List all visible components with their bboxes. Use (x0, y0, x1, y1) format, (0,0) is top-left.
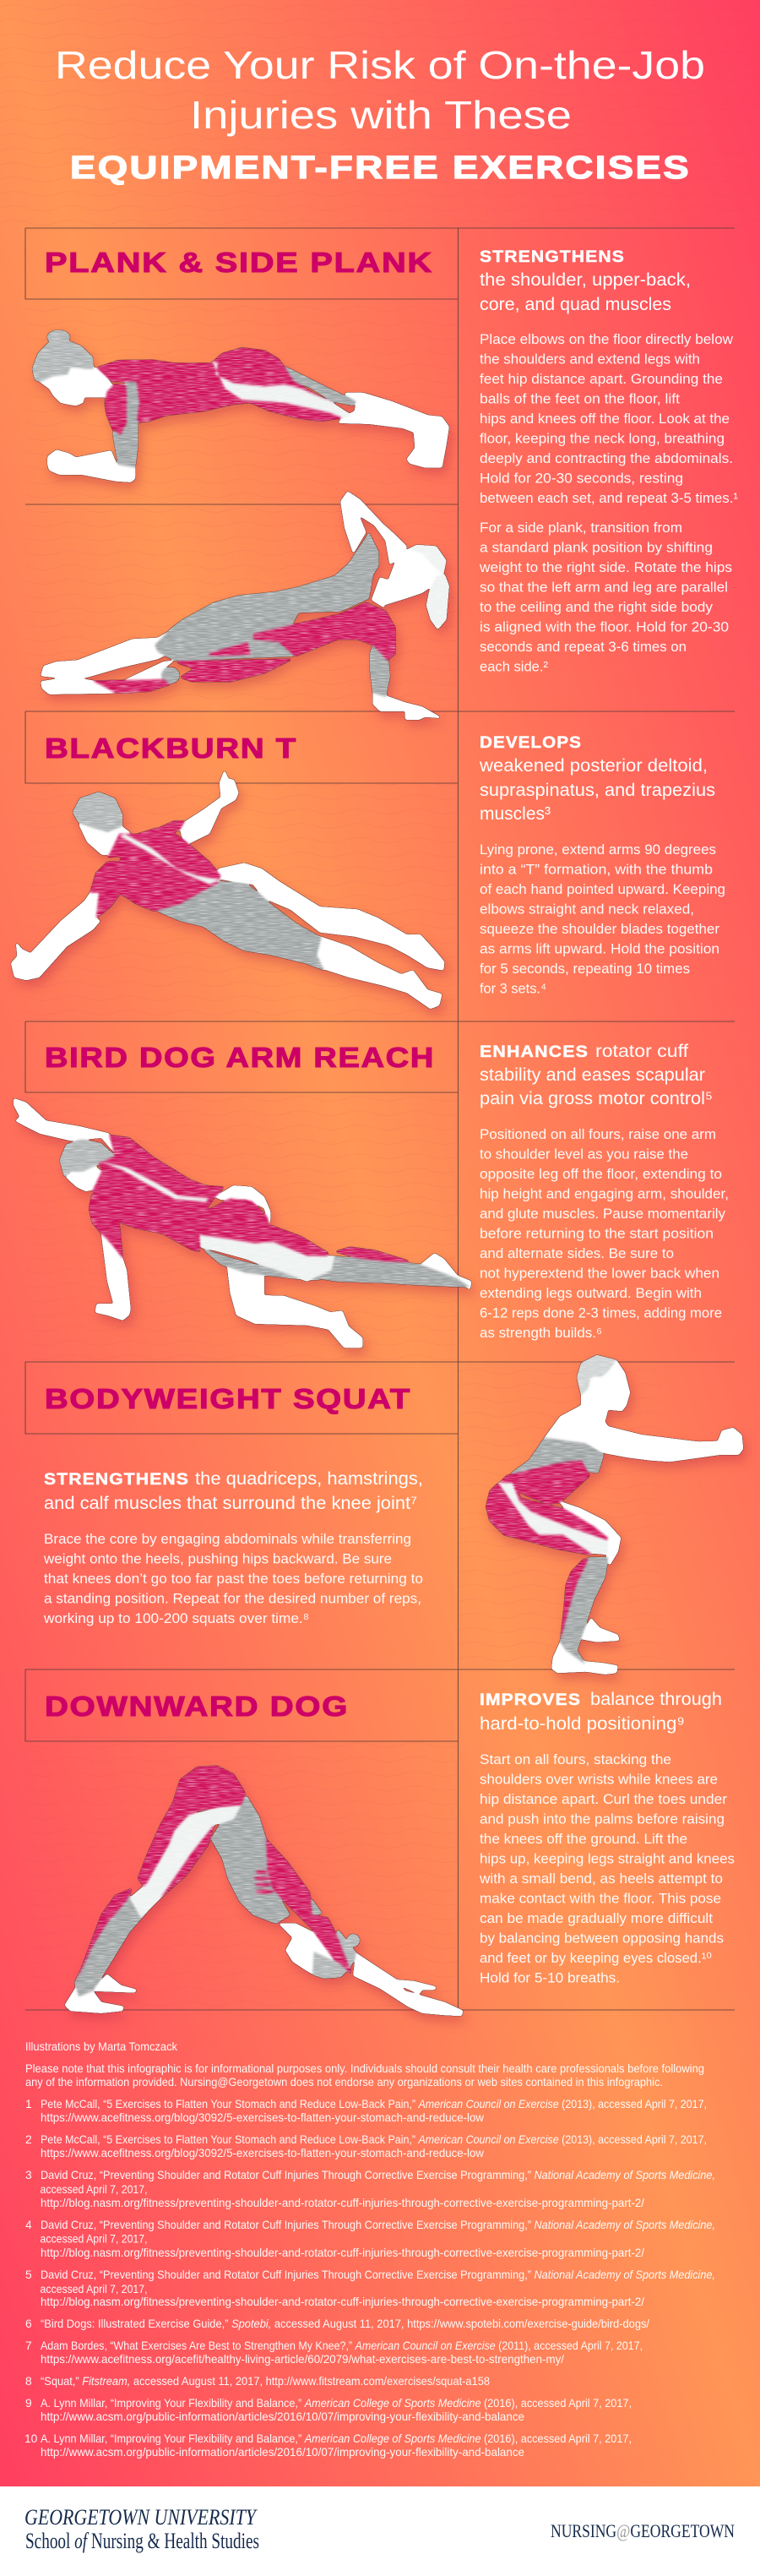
body: side plank instructions: to the ceiling and the right side body (480, 600, 714, 615)
reference 4: 4 (25, 2219, 32, 2231)
subhead: bird dog benefit: pain via gross motor control⁵ (480, 1088, 713, 1108)
reference 1: 1 (25, 2098, 32, 2110)
logo: georgetown school of nursing: GEORGETOWN UNIVERSITY (24, 2505, 258, 2530)
kicker: strengthens: STRENGTHENS (44, 1471, 189, 1489)
body: bird dog instructions: opposite leg off the floor, extending to (480, 1167, 722, 1182)
footnotes and credits (24, 2040, 715, 2459)
subhead: bird dog benefit: rotator cuff (595, 1041, 688, 1061)
illustration: blackburn t figure (11, 771, 444, 1009)
reference 8: “Squat,” Fitstream, accessed August 11, 2017, http://www.fitstream.com/exercises/squat-a158 (41, 2375, 490, 2388)
reference 4: accessed April 7, 2017, (41, 2232, 147, 2246)
body: plank instructions: Place elbows on the floor directly below (480, 332, 733, 347)
title line 3: EQUIPMENT-FREE EXERCISES (70, 150, 691, 186)
reference 1: https://www.acefitness.org/blog/3092/5-exercises-to-flatten-your-stomach-and-reduce-low (41, 2111, 484, 2124)
body: plank instructions: hips and knees off the floor. Look at the (480, 411, 730, 427)
reference 10 (24, 2432, 632, 2459)
reference 10: A. Lynn Millar, “Improving Your Flexibility and Balance,” American College of Sports Medicine (2016), accessed April 7, 2017, (41, 2432, 632, 2445)
illustration: plank figure (32, 330, 449, 482)
illustration: bodyweight squat figure (486, 1355, 743, 1675)
body: plank instructions: Hold for 20-30 seconds, resting (480, 471, 683, 487)
body: squat instructions: that knees don’t go too far past the toes before returning to (44, 1571, 423, 1587)
panel: downward dog text (45, 1689, 735, 1985)
logo: georgetown school of nursing: School of Nursing & Health Studies (25, 2529, 259, 2553)
body: downward dog instructions: with a small bend, as heels attempt to (479, 1871, 723, 1887)
body: blackburn instructions (480, 842, 725, 997)
reference 7: https://www.acefitness.org/acefit/healthy-living-article/60/2079/what-exercises-are-best-to-strengthen-my/ (41, 2353, 564, 2366)
body: downward dog instructions: Start on all fours, stacking the (480, 1752, 671, 1767)
subhead: bird dog benefit: stability and eases scapular (480, 1065, 705, 1085)
reference 5: accessed April 7, 2017, (41, 2283, 147, 2296)
body: bird dog instructions: as strength builds.⁶ (480, 1326, 602, 1341)
body: blackburn instructions: elbows straight and neck relaxed, (480, 902, 694, 918)
body: plank instructions: the shoulders and extend legs with (480, 351, 700, 367)
body: plank instructions: balls of the feet on the floor, lift (480, 392, 680, 407)
reference 7: 7 (25, 2339, 32, 2352)
reference 3: accessed April 7, 2017, (41, 2183, 147, 2196)
reference 5: http://blog.nasm.org/fitness/preventing-shoulder-and-rotator-cuff-injuries-through-corrective-exercise-programming-part-2/ (41, 2296, 644, 2308)
body: downward dog instructions: and push into the palms before raising (480, 1811, 725, 1827)
body: bird dog instructions: and glute muscles. Pause momentarily (480, 1206, 726, 1222)
body: downward dog instructions: the knees off the ground. Lift the (480, 1832, 687, 1847)
subhead: blackburn muscles: supraspinatus, and trapezius (480, 780, 715, 800)
body: blackburn instructions: Lying prone, extend arms 90 degrees (480, 842, 716, 858)
reference 8: 8 (25, 2375, 32, 2388)
illustration: side plank figure (41, 492, 449, 720)
body: bird dog instructions: to shoulder level as you raise the (480, 1147, 688, 1163)
reference 3 (25, 2169, 715, 2209)
reference 1 (25, 2098, 707, 2124)
panel: bird dog text (45, 1041, 729, 1341)
body: blackburn instructions: into a “T” formation, with the thumb (480, 862, 713, 877)
illustration: downward dog figure (65, 1766, 463, 2016)
body: plank instructions (480, 332, 739, 506)
logo: nursing at georgetown: NURSING@GEORGETOWN (551, 2520, 735, 2541)
body: downward dog instructions: shoulders over wrists while knees are (480, 1773, 718, 1788)
subhead: squat muscles: and calf muscles that surround the knee joint⁷ (44, 1493, 417, 1513)
illustration: bird dog figure (14, 1098, 471, 1348)
body: side plank instructions: For a side plank, transition from (480, 520, 682, 536)
subhead: plank muscles (480, 270, 691, 314)
reference 5: 5 (25, 2268, 32, 2281)
heading: bird dog: BIRD DOG ARM REACH (45, 1042, 435, 1073)
body: squat instructions: Brace the core by engaging abdominals while transferring (44, 1532, 411, 1547)
heading: blackburn t: BLACKBURN T (45, 732, 297, 764)
panel: plank and side plank text (45, 247, 739, 674)
body: plank instructions: between each set, and repeat 3-5 times.¹ (480, 491, 739, 506)
body: downward dog instructions: hip distance apart. Curl the toes under (480, 1792, 728, 1807)
disclaimer: any of the information provided. Nursing@Georgetown does not endorse any organizations or web sites contained in this infographic. (25, 2076, 663, 2089)
heading: downward dog: DOWNWARD DOG (45, 1691, 349, 1722)
reference 5 (25, 2268, 715, 2308)
reference 6: “Bird Dogs: Illustrated Exercise Guide,” Spotebi, accessed August 11, 2017, https://www.spotebi.com/exercise-guide/bird-dogs/ (41, 2317, 649, 2330)
panel: blackburn t text (45, 732, 725, 997)
body: side plank instructions: is aligned with the floor. Hold for 20-30 (480, 620, 729, 635)
body: bird dog instructions: Positioned on all fours, raise one arm (480, 1127, 716, 1142)
reference 9 (25, 2397, 632, 2423)
reference 7: Adam Bordes, “What Exercises Are Best to Strengthen My Knee?,” American Council on Exercise (2011), accessed April 7, 2017, (41, 2339, 643, 2352)
body: squat instructions: weight onto the heels, pushing hips backward. Be sure (43, 1551, 392, 1566)
reference 9: 9 (25, 2397, 32, 2410)
heading: squat: BODYWEIGHT SQUAT (45, 1383, 411, 1414)
body: side plank instructions: each side.² (480, 659, 548, 674)
reference 3: David Cruz, “Preventing Shoulder and Rotator Cuff Injuries Through Corrective Exercise Programming,” National Academy of Sports Medicine, (41, 2169, 715, 2181)
reference 7 (25, 2339, 643, 2366)
disclaimer: Please note that this infographic is for informational purposes only. Individuals should consult their health care professionals before following (25, 2062, 704, 2075)
kicker: enhances: ENHANCES (480, 1043, 589, 1061)
kicker: improves: IMPROVES (480, 1691, 581, 1709)
kicker: develops: DEVELOPS (480, 734, 582, 752)
body: side plank instructions: weight to the right side. Rotate the hips (479, 560, 732, 575)
title line 1: Reduce Your Risk of On-the-Job (55, 43, 705, 87)
body: downward dog instructions: make contact with the floor. This pose (480, 1891, 721, 1906)
reference 2: https://www.acefitness.org/blog/3092/5-exercises-to-flatten-your-stomach-and-reduce-low (41, 2147, 484, 2159)
subhead: plank muscles: core, and quad muscles (480, 294, 671, 314)
reference 2: Pete McCall, “5 Exercises to Flatten Your Stomach and Reduce Low-Back Pain,” American Council on Exercise (2013), accessed April 7, 2017, (41, 2133, 707, 2146)
body: side plank instructions: seconds and repeat 3-6 times on (480, 640, 687, 655)
section frame lines (25, 228, 735, 2010)
logo: georgetown school of nursing (24, 2505, 259, 2553)
reference 10: http://www.acsm.org/public-information/articles/2016/10/07/improving-your-flexibility-and-balance (41, 2446, 524, 2459)
body: blackburn instructions: of each hand pointed upward. Keeping (480, 882, 725, 897)
body: bird dog instructions: extending legs outward. Begin with (480, 1286, 702, 1301)
wave texture panels (0, 0, 760, 2010)
reference 1: Pete McCall, “5 Exercises to Flatten Your Stomach and Reduce Low-Back Pain,” American Council on Exercise (2013), accessed April 7, 2017, (41, 2098, 707, 2110)
body: blackburn instructions: squeeze the shoulder blades together (480, 922, 720, 937)
body: squat instructions: working up to 100-200 squats over time.⁸ (43, 1611, 309, 1626)
subhead: downward dog benefit (480, 1689, 722, 1734)
illustration credit: Illustrations by Marta Tomczack (25, 2040, 177, 2053)
reference 10: 10 (24, 2432, 38, 2445)
reference 3: http://blog.nasm.org/fitness/preventing-shoulder-and-rotator-cuff-injuries-through-corrective-exercise-programming-part-2/ (41, 2197, 644, 2209)
panel: bodyweight squat text (43, 1383, 423, 1626)
disclaimer (25, 2062, 704, 2089)
body: blackburn instructions: as arms lift upward. Hold the position (480, 941, 719, 956)
body: bird dog instructions: and alternate sides. Be sure to (480, 1246, 674, 1261)
reference 5: David Cruz, “Preventing Shoulder and Rotator Cuff Injuries Through Corrective Exercise Programming,” National Academy of Sports Medicine, (41, 2268, 715, 2281)
reference 9: A. Lynn Millar, “Improving Your Flexibility and Balance,” American College of Sports Medicine (2016), accessed April 7, 2017, (41, 2397, 632, 2410)
body: downward dog instructions (479, 1752, 735, 1985)
body: downward dog instructions: Hold for 5-10 breaths. (480, 1970, 620, 1985)
body: side plank instructions (479, 520, 732, 674)
subhead: blackburn muscles: weakened posterior deltoid, (479, 755, 708, 776)
body: bird dog instructions: not hyperextend the lower back when (480, 1266, 719, 1281)
body: plank instructions: deeply and contracting the abdominals. (480, 451, 733, 466)
body: side plank instructions: a standard plank position by shifting (480, 541, 713, 556)
body: plank instructions: feet hip distance apart. Grounding the (480, 372, 723, 387)
body: plank instructions: floor, keeping the neck long, breathing (480, 431, 725, 446)
subhead: downward dog benefit: hard-to-hold positioning⁹ (480, 1713, 685, 1734)
title line 2: Injuries with These (190, 93, 572, 137)
subhead: blackburn muscles: muscles³ (480, 803, 551, 824)
body: squat instructions (43, 1532, 423, 1626)
subhead: plank muscles: the shoulder, upper-back, (480, 270, 691, 290)
body: bird dog instructions: 6-12 reps done 2-3 times, adding more (480, 1306, 722, 1321)
body: bird dog instructions: before returning to the start position (480, 1227, 714, 1242)
kicker: strengthens: STRENGTHENS (480, 248, 625, 266)
reference 2 (25, 2133, 707, 2159)
reference 4: David Cruz, “Preventing Shoulder and Rotator Cuff Injuries Through Corrective Exercise Programming,” National Academy of Sports Medicine, (41, 2219, 715, 2231)
subhead: squat muscles: the quadriceps, hamstrings, (195, 1468, 423, 1489)
body: blackburn instructions: for 3 sets.⁴ (480, 982, 546, 997)
reference 6: 6 (25, 2317, 32, 2330)
reference 2: 2 (25, 2133, 32, 2146)
body: blackburn instructions: for 5 seconds, repeating 10 times (480, 961, 690, 977)
body: downward dog instructions: hips up, keeping legs straight and knees (480, 1852, 735, 1867)
reference 4 (25, 2219, 715, 2259)
body: bird dog instructions: hip height and engaging arm, shoulder, (480, 1186, 729, 1201)
body: bird dog instructions (480, 1127, 729, 1341)
subhead: squat muscles (44, 1468, 423, 1513)
reference 3: 3 (25, 2169, 32, 2181)
reference 9: http://www.acsm.org/public-information/articles/2016/10/07/improving-your-flexibility-and-balance (41, 2410, 524, 2423)
body: downward dog instructions: by balancing between opposing hands (480, 1931, 724, 1947)
subhead: downward dog benefit: balance through (590, 1689, 722, 1709)
body: squat instructions: a standing position. Repeat for the desired number of reps, (44, 1592, 421, 1607)
heading: plank: PLANK & SIDE PLANK (45, 247, 433, 278)
body: downward dog instructions: can be made gradually more difficult (480, 1911, 713, 1926)
reference 4: http://blog.nasm.org/fitness/preventing-shoulder-and-rotator-cuff-injuries-through-corrective-exercise-programming-part-2/ (41, 2247, 644, 2259)
title (55, 43, 705, 186)
body: side plank instructions: so that the left arm and leg are parallel (480, 580, 728, 595)
subhead: bird dog benefit (480, 1041, 713, 1108)
subhead: blackburn muscles (479, 755, 715, 824)
body: downward dog instructions: and feet or by keeping eyes closed.¹⁰ (480, 1951, 712, 1966)
